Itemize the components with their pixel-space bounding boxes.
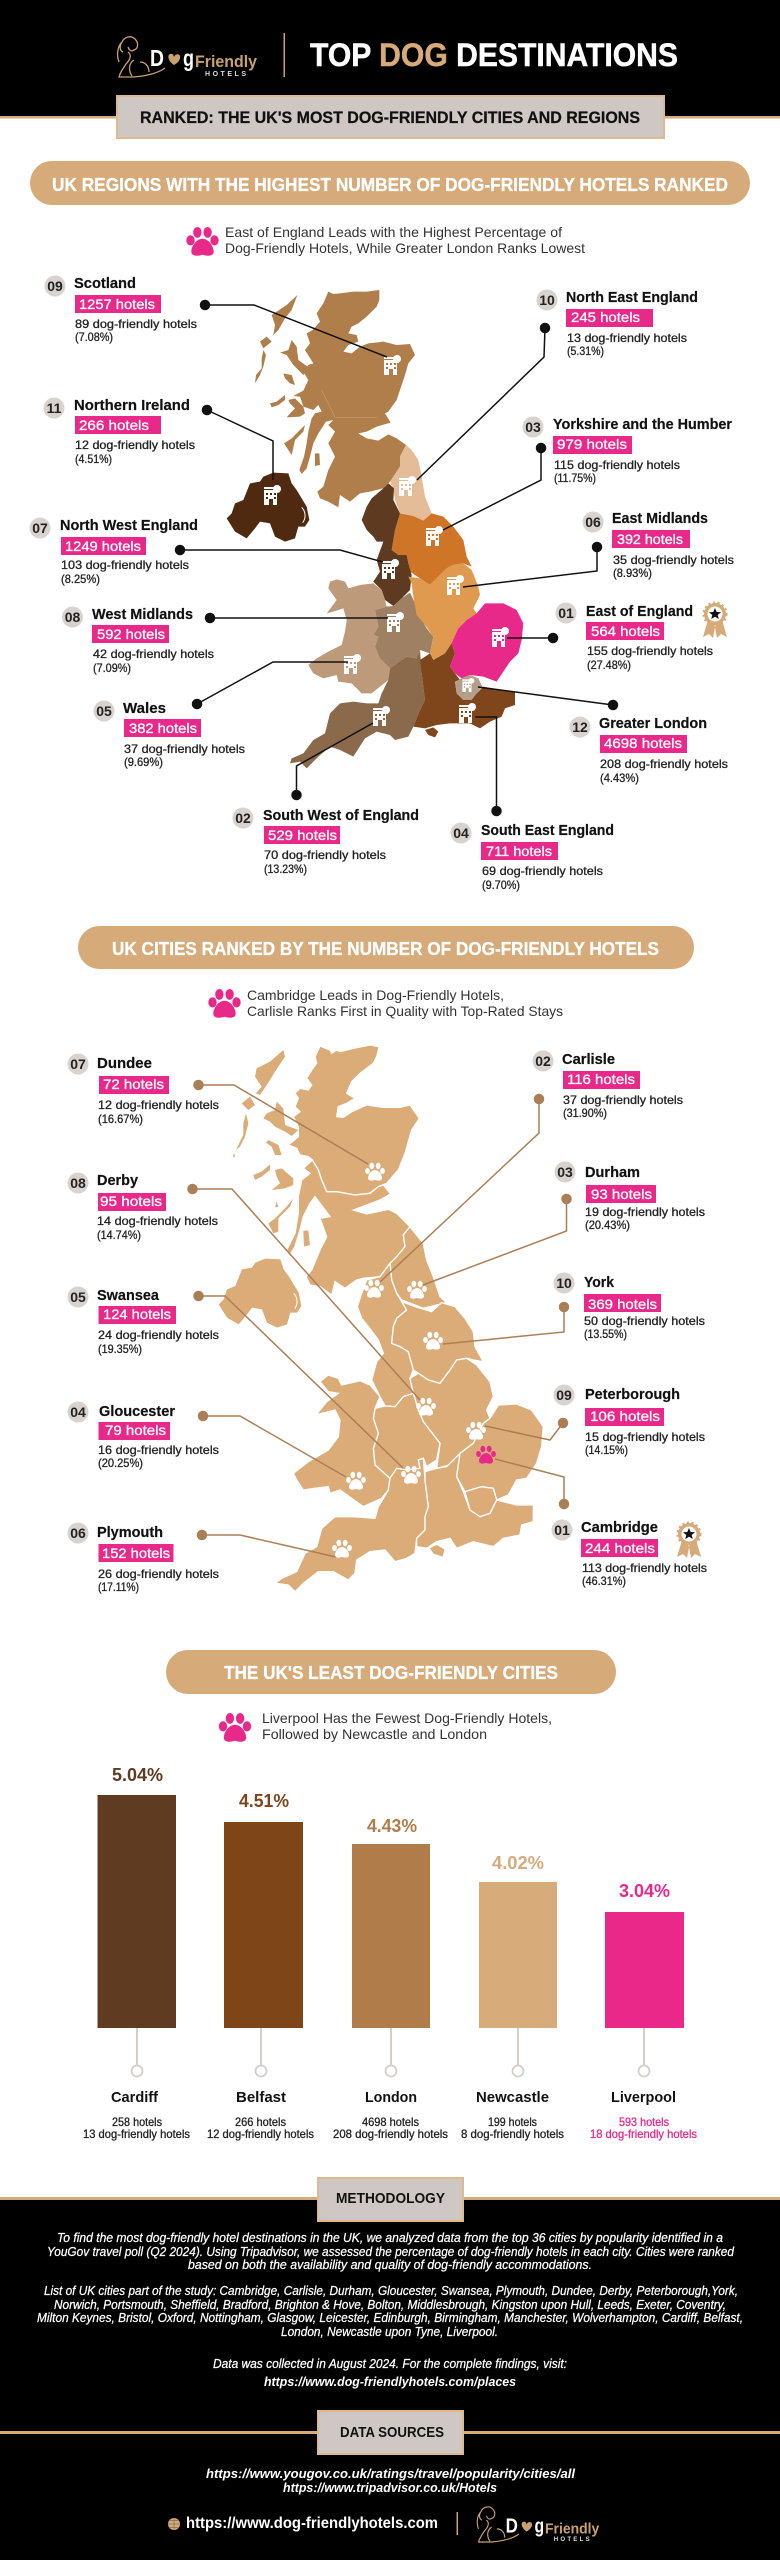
logo: Dog Friendly Hotels: g: [183, 45, 194, 71]
bar: Cardiff: [83, 1765, 190, 2141]
bar: London: 4.43%: [367, 1816, 417, 1836]
leader line: North West England: [176, 546, 383, 562]
callout: Gloucester: 79 hotels: [105, 1422, 166, 1438]
callout: North East England: 245 hotels: [571, 309, 640, 325]
callout: Plymouth: Plymouth: [97, 1524, 163, 1541]
callout: Cambridge: Cambridge: [581, 1519, 658, 1536]
region: Greater London: [455, 675, 482, 700]
callout: Cambridge: (46.31%): [582, 1574, 626, 1588]
leader line: Swansea: [194, 1292, 403, 1468]
callout: Wales: 382 hotels: [129, 720, 197, 736]
callout: Yorkshire and the Humber: 03: [525, 419, 541, 435]
icon: pink paw cities: [208, 989, 241, 1018]
logo: Dog Friendly Hotels: D: [150, 45, 164, 71]
bar: Newcastle: 4.02%: [492, 1853, 544, 1873]
section heading: regions: [30, 161, 750, 205]
callout: North West England: (8.25%): [61, 572, 100, 586]
callout: Carlisle: (31.90%): [563, 1106, 607, 1120]
icon: paw Peterborough: [466, 1422, 486, 1440]
callout: West Midlands: [62, 606, 214, 675]
footer logo: [477, 2507, 600, 2543]
source links: https://www.tripadvisor.co.uk/Hotels: [283, 2481, 497, 2495]
intro text: least friendly: [262, 1710, 552, 1742]
callout: Scotland: (7.08%): [75, 330, 113, 344]
callout: North West England: North West England: [60, 517, 198, 534]
leader line: East Midlands: [463, 542, 602, 587]
callout: South East England: 04: [453, 825, 469, 841]
callout: York: 50 dog-friendly hotels: [584, 1314, 705, 1328]
region: North East England: [390, 445, 432, 521]
bar: Newcastle: Newcastle: [476, 2089, 549, 2106]
leader line: Plymouth: [198, 1530, 336, 1557]
region: East Midlands: [408, 563, 480, 660]
icon: hotel East of England: [492, 627, 509, 647]
callout: Greater London: 12: [572, 719, 588, 735]
icon: paw Derby: [416, 1398, 436, 1416]
leader line: Northern Ireland: [202, 406, 273, 480]
callout: Wales: Wales: [123, 700, 166, 717]
callout: South East England: 69 dog-friendly hotels: [482, 864, 603, 878]
callout: York: 10: [556, 1275, 572, 1291]
callout: Derby: (14.74%): [97, 1228, 141, 1242]
callout: Derby: [68, 1172, 218, 1242]
icon: hotel North East: [399, 476, 416, 496]
callout: East of England: (27.48%): [587, 658, 631, 672]
callout: South West of England: South West of England: [263, 807, 419, 824]
icon: hotel East Midlands: [447, 575, 464, 595]
list of cities: [37, 2284, 743, 2339]
callout: East of England: 155 dog-friendly hotels: [587, 644, 713, 658]
leader line: Yorkshire: [443, 444, 546, 530]
leader line: East of England: [507, 634, 558, 642]
callout: South West of England: 02: [235, 810, 251, 826]
callout: North East England: [536, 289, 698, 358]
header band: [0, 0, 780, 118]
callout: Northern Ireland: 11: [47, 400, 62, 416]
icon: pink paw regions: [186, 227, 219, 256]
region: Scotland: [255, 290, 415, 507]
icon: paw Cambridge: [476, 1446, 496, 1464]
callout: Northern Ireland: 12 dog-friendly hotels: [75, 438, 195, 452]
footer divider: [456, 2512, 458, 2535]
bar: Newcastle: 199 hotels: [488, 2115, 537, 2129]
footer website link: https://www.dog-friendlyhotels.com: [186, 2515, 438, 2532]
icon: hotel Greater London: [462, 678, 474, 692]
callout: Scotland: 1257 hotels: [79, 296, 155, 312]
intro text: regions: [225, 224, 585, 256]
map: UK cities: [219, 1045, 543, 1592]
callout: East Midlands: 35 dog-friendly hotels: [613, 553, 734, 567]
callout: West Midlands: (7.09%): [93, 661, 131, 675]
callout: Peterborough: Peterborough: [585, 1386, 680, 1403]
callout: East Midlands: 392 hotels: [617, 531, 683, 547]
callout: East Midlands: 06: [585, 514, 601, 530]
data sources label: [318, 2411, 463, 2454]
callout: North East England: (5.31%): [567, 344, 604, 358]
callout: Cambridge: 01: [554, 1522, 570, 1538]
list of cities: Milton Keynes, Bristol, Oxford, Nottingham, Glasgow, Leicester, Edinburgh, Birmingham, Manchester, Wolverhampton, Cardiff, Belfast,: [37, 2311, 743, 2325]
callout: Plymouth: 06: [70, 1525, 86, 1541]
callout: Gloucester: Gloucester: [99, 1403, 175, 1420]
bar: Liverpool: [590, 1881, 697, 2141]
callout: Cambridge: 244 hotels: [585, 1540, 655, 1556]
callout: Carlisle: 02: [535, 1053, 551, 1069]
callout: North East England: 13 dog-friendly hotels: [567, 331, 687, 345]
subtitle banner: RANKED: THE UK'S MOST DOG-FRIENDLY CITIES AND REGIONS: [140, 108, 640, 127]
data collection note: Data was collected in August 2024. For the complete findings, visit:: [213, 2357, 567, 2371]
leader line: Scotland: [200, 300, 387, 357]
bar: Belfast: 266 hotels: [235, 2115, 286, 2129]
callout: Wales: [94, 700, 245, 769]
callout: Northern Ireland: 266 hotels: [79, 417, 149, 433]
icon: paw Gloucester: [346, 1472, 366, 1490]
callout: Plymouth: [68, 1522, 219, 1594]
callout: Wales: 05: [96, 703, 112, 719]
callout: York: York: [584, 1274, 615, 1291]
callout: Scotland: Scotland: [74, 275, 136, 292]
callout: Plymouth: 26 dog-friendly hotels: [98, 1567, 219, 1581]
footer logo: D: [506, 2515, 518, 2537]
callout: East Midlands: [582, 510, 734, 580]
intro text: cities: Carlisle Ranks First in Quality with Top-Rated Stays: [247, 1003, 563, 1019]
callout: East Midlands: East Midlands: [612, 510, 708, 527]
callout: Gloucester: (20.25%): [98, 1456, 143, 1470]
bar: Cardiff: 13 dog-friendly hotels: [83, 2127, 190, 2141]
callout: East of England: East of England: [586, 603, 693, 620]
methodology paragraph: YouGov travel poll (Q2 2024). Using Tripadvisor, we assessed the percentage of dog-friendly hotels in each city. Cities were ranked: [47, 2245, 735, 2259]
icon: hotel Scotland: [384, 355, 401, 375]
leader line: Durham: [423, 1194, 571, 1285]
callout: Northern Ireland: Northern Ireland: [74, 397, 190, 414]
source links: https://www.yougov.co.uk/ratings/travel/popularity/cities/all: [206, 2467, 576, 2481]
callout: Durham: 93 hotels: [591, 1186, 652, 1202]
icon: award rosette East of England: [703, 603, 727, 638]
callout: Cambridge: [552, 1519, 707, 1588]
region: Northern Ireland: [227, 473, 309, 542]
leader line: Dundee: [194, 1080, 368, 1164]
hotel markers on map: [264, 355, 509, 726]
callout: Swansea: Swansea: [97, 1287, 160, 1304]
callout: North East England: 10: [539, 292, 555, 308]
callout: Yorkshire and the Humber: 979 hotels: [557, 436, 627, 452]
city paw markers: [332, 1163, 496, 1558]
logo: Dog Friendly Hotels: HOTELS: [205, 71, 246, 78]
callout: Wales: (9.69%): [124, 755, 163, 769]
callout: Greater London: 208 dog-friendly hotels: [600, 757, 728, 771]
bar: Belfast: Belfast: [236, 2089, 286, 2106]
bar: London: London: [365, 2089, 417, 2106]
callout: West Midlands: West Midlands: [92, 606, 193, 623]
callout: Carlisle: 116 hotels: [567, 1071, 635, 1087]
bar: Belfast: 12 dog-friendly hotels: [207, 2127, 314, 2141]
callout: Derby: Derby: [97, 1172, 139, 1189]
callout: Peterborough: 106 hotels: [590, 1408, 660, 1424]
footer logo: Friendly: [545, 2521, 600, 2537]
icon: paw Durham: [407, 1281, 427, 1299]
callout: Scotland: 89 dog-friendly hotels: [75, 317, 197, 331]
footer band: [0, 2197, 780, 2560]
bar: Belfast: [207, 1791, 314, 2141]
callout: Northern Ireland: (4.51%): [75, 452, 112, 466]
callout: North West England: 1249 hotels: [65, 538, 141, 554]
icon: paw York: [423, 1332, 443, 1350]
callout: South East England: South East England: [481, 822, 614, 839]
leader line: West Midlands: [206, 614, 388, 622]
callout: Carlisle: [532, 1050, 683, 1120]
bar: London: 208 dog-friendly hotels: [333, 2127, 448, 2141]
region: Scotland and islands: [233, 1045, 447, 1308]
callout: Carlisle: 37 dog-friendly hotels: [563, 1093, 683, 1107]
icon: hotel Northern Ireland: [264, 485, 281, 505]
icon: paw Swansea: [401, 1466, 421, 1484]
icon: paw Dundee: [365, 1163, 385, 1181]
leader line: Wales: [192, 662, 348, 708]
leader line: Carlisle: [380, 1094, 544, 1282]
icon: hotel North West: [382, 559, 399, 579]
callout: South East England: [450, 822, 614, 892]
callout: North West England: 103 dog-friendly hotels: [61, 558, 189, 572]
bar chart: least dog-friendly cities: [83, 1765, 697, 2141]
callout: North West England: 07: [32, 520, 48, 536]
callout: Dundee: Dundee: [97, 1055, 152, 1072]
callout: Dundee: 07: [70, 1056, 86, 1072]
leader line: South West: [292, 723, 373, 800]
data sources label: DATA SOURCES: [340, 2424, 444, 2441]
bar: Liverpool: 593 hotels: [619, 2115, 669, 2129]
callout: Gloucester: 04: [70, 1404, 86, 1420]
callout: Swansea: 124 hotels: [103, 1306, 171, 1322]
bar: Newcastle: [461, 1853, 564, 2141]
icon: hotel Wales: [344, 654, 361, 674]
callout: Peterborough: 15 dog-friendly hotels: [585, 1430, 705, 1444]
methodology label: METHODOLOGY: [336, 2190, 445, 2207]
callout: Swansea: (19.35%): [98, 1342, 142, 1356]
bar: Liverpool: 18 dog-friendly hotels: [590, 2127, 697, 2141]
callout: Durham: (20.43%): [585, 1218, 630, 1232]
callout: East of England: 01: [558, 605, 574, 621]
source links: [206, 2467, 576, 2495]
callout: South West of England: [232, 807, 419, 876]
callout: South West of England: (13.23%): [264, 862, 307, 876]
subtitle banner: [117, 96, 664, 138]
leader line: Peterborough: [485, 1418, 568, 1440]
icon: paw Plymouth: [332, 1540, 352, 1558]
bar: London: [333, 1816, 448, 2141]
methodology paragraph: [47, 2231, 735, 2272]
region: Wales: [308, 579, 390, 693]
callout: Gloucester: 16 dog-friendly hotels: [98, 1443, 219, 1457]
methodology paragraph: To find the most dog-friendly hotel destinations in the UK, we analyzed data from the top 36 cities by popularity identified in a: [57, 2231, 723, 2245]
callout: West Midlands: 42 dog-friendly hotels: [93, 647, 214, 661]
callout: Carlisle: Carlisle: [562, 1051, 615, 1068]
leader line: South East: [475, 717, 501, 816]
callout: Peterborough: 09: [556, 1387, 572, 1403]
callout: Peterborough: (14.15%): [585, 1443, 628, 1457]
callout: Plymouth: 152 hotels: [102, 1545, 170, 1561]
callout: Durham: 19 dog-friendly hotels: [585, 1205, 705, 1219]
icon: paw Carlisle: [364, 1280, 384, 1298]
region: West Midlands: [373, 593, 433, 668]
callout: Yorkshire and the Humber: [522, 416, 732, 485]
section heading: cities: UK CITIES RANKED BY THE NUMBER OF DOG-FRIENDLY HOTELS: [112, 939, 659, 959]
intro text: regions: Dog-Friendly Hotels, While Greater London Ranks Lowest: [225, 240, 585, 256]
bar: Belfast: 4.51%: [239, 1791, 289, 1811]
region: Northern Ireland: [219, 1259, 301, 1328]
region: North West England: [362, 483, 412, 606]
callout: York: 369 hotels: [588, 1296, 657, 1312]
icon: hotel West Midlands: [387, 612, 404, 632]
callout: Scotland: 09: [47, 278, 63, 294]
callout: Northern Ireland: [44, 397, 195, 466]
callout: Gloucester: [68, 1402, 219, 1470]
section heading: cities: [78, 926, 694, 969]
callout: South West of England: 529 hotels: [268, 827, 337, 843]
section heading: least friendly: [166, 1650, 616, 1694]
leader line: Derby: [188, 1184, 420, 1400]
methodology label: [318, 2178, 463, 2221]
logo: Dog Friendly Hotels: [118, 37, 258, 78]
bar: Liverpool: Liverpool: [611, 2089, 676, 2106]
callout: Greater London: 4698 hotels: [604, 735, 682, 751]
bar: Cardiff: 5.04%: [112, 1765, 163, 1785]
title: TOP DOG DESTINATIONS: [310, 37, 678, 73]
intro text: least friendly: Liverpool Has the Fewest Dog-Friendly Hotels,: [262, 1710, 552, 1726]
leader line: Gloucester: [198, 1412, 346, 1477]
region: South West of England: [290, 650, 425, 768]
leader line: Greater London: [478, 687, 618, 710]
callout: Plymouth: (17.11%): [98, 1580, 139, 1594]
footer logo: HOTELS: [554, 2536, 590, 2543]
callout: Dundee: (16.67%): [98, 1112, 143, 1126]
callout: North West England: [30, 517, 198, 586]
map: UK regions: [227, 290, 523, 768]
callout: Durham: 03: [557, 1164, 573, 1180]
intro text: least friendly: Followed by Newcastle and London: [262, 1726, 487, 1742]
leader line: Cambridge: [495, 1459, 568, 1508]
callout: West Midlands: 08: [65, 609, 80, 625]
callout: Scotland: [44, 275, 197, 344]
leader line: York: [443, 1302, 568, 1344]
intro text: cities: [247, 987, 563, 1019]
icon: globe: [168, 2518, 180, 2530]
callout: West Midlands: 592 hotels: [97, 626, 165, 642]
bar: Cardiff: 258 hotels: [112, 2115, 162, 2129]
regions: England and Wales: [275, 1263, 543, 1592]
callout: Swansea: 05: [70, 1289, 86, 1305]
intro text: regions: East of England Leads with the Highest Percentage of: [225, 224, 562, 240]
callout: Dundee: 72 hotels: [103, 1076, 164, 1092]
callout: Durham: Durham: [585, 1164, 640, 1181]
logo: Dog Friendly Hotels: Friendly: [195, 52, 258, 71]
icon: hotel South East: [459, 703, 476, 723]
callout: Greater London: (4.43%): [600, 771, 639, 785]
callout: South West of England: 70 dog-friendly hotels: [264, 848, 386, 862]
callout: Dundee: 12 dog-friendly hotels: [98, 1098, 219, 1112]
callout: Derby: 14 dog-friendly hotels: [97, 1214, 218, 1228]
list of cities: Norwich, Portsmouth, Sheffield, Bradford, Brighton & Hove, Bolton, Middlesbrough, Kingston upon Hull, Leeds, Exeter, Coventry,: [54, 2298, 726, 2312]
callout: Yorkshire and the Humber: (11.75%): [554, 471, 596, 485]
region: East of England: [450, 603, 523, 682]
region: South East England: [413, 643, 515, 737]
icon: award rosette Cambridge: [677, 1523, 701, 1558]
bar: London: 4698 hotels: [362, 2115, 419, 2129]
callout: Dundee: [68, 1054, 219, 1126]
callout: North East England: North East England: [566, 289, 698, 306]
methodology paragraph: based on both the availability and quality of dog-friendly accommodations.: [188, 2258, 592, 2272]
callout: Greater London: Greater London: [599, 715, 707, 732]
callout: Cambridge: 113 dog-friendly hotels: [582, 1561, 707, 1575]
callout: Greater London: [570, 715, 728, 785]
icon: hotel South West: [373, 706, 390, 726]
callout: Peterborough: [554, 1384, 705, 1457]
callout: Yorkshire and the Humber: Yorkshire and the Humber: [553, 416, 732, 433]
section heading: least friendly: THE UK'S LEAST DOG-FRIENDLY CITIES: [224, 1663, 558, 1683]
bar: Newcastle: 8 dog-friendly hotels: [461, 2127, 564, 2141]
section heading: regions: UK REGIONS WITH THE HIGHEST NUMBER OF DOG-FRIENDLY HOTELS RANKED: [52, 175, 728, 195]
callout: Durham: [554, 1162, 705, 1232]
callout: East of England: 564 hotels: [591, 623, 660, 639]
callout: York: (13.55%): [584, 1327, 627, 1341]
icon: pink paw least friendly: [219, 1713, 251, 1742]
callout: Wales: 37 dog-friendly hotels: [124, 742, 245, 756]
header divider: [284, 33, 285, 77]
list of cities: List of UK cities part of the study: Cambridge, Carlisle, Durham, Gloucester, Swansea, Plymouth, Dundee, Derby, Peterborough,York,: [44, 2284, 738, 2298]
footer logo: g: [535, 2515, 544, 2537]
callout: South East England: (9.70%): [482, 878, 520, 892]
intro text: cities: Cambridge Leads in Dog-Friendly Hotels,: [247, 987, 504, 1003]
region: Yorkshire and the Humber: [392, 513, 472, 585]
callout: East Midlands: (8.93%): [613, 566, 652, 580]
callout: Swansea: 24 dog-friendly hotels: [98, 1328, 219, 1342]
callout: Derby: 95 hotels: [100, 1193, 162, 1209]
callout: South East England: 711 hotels: [486, 843, 552, 859]
bar: Cardiff: Cardiff: [111, 2089, 159, 2106]
list of cities: London, Newcastle upon Tyne, Liverpool.: [281, 2325, 498, 2339]
leader line: North East England: [417, 324, 550, 480]
callout: East of England: [556, 602, 713, 672]
bar: Liverpool: 3.04%: [619, 1881, 670, 1901]
data collection note: [213, 2357, 567, 2389]
callout: Yorkshire and the Humber: 115 dog-friendly hotels: [554, 458, 680, 472]
callout: Swansea: [68, 1286, 219, 1356]
callout: Derby: 08: [70, 1175, 86, 1191]
data collection note: https://www.dog-friendlyhotels.com/places: [264, 2375, 516, 2389]
icon: hotel Yorkshire: [426, 526, 443, 546]
callout: York: [554, 1272, 705, 1341]
